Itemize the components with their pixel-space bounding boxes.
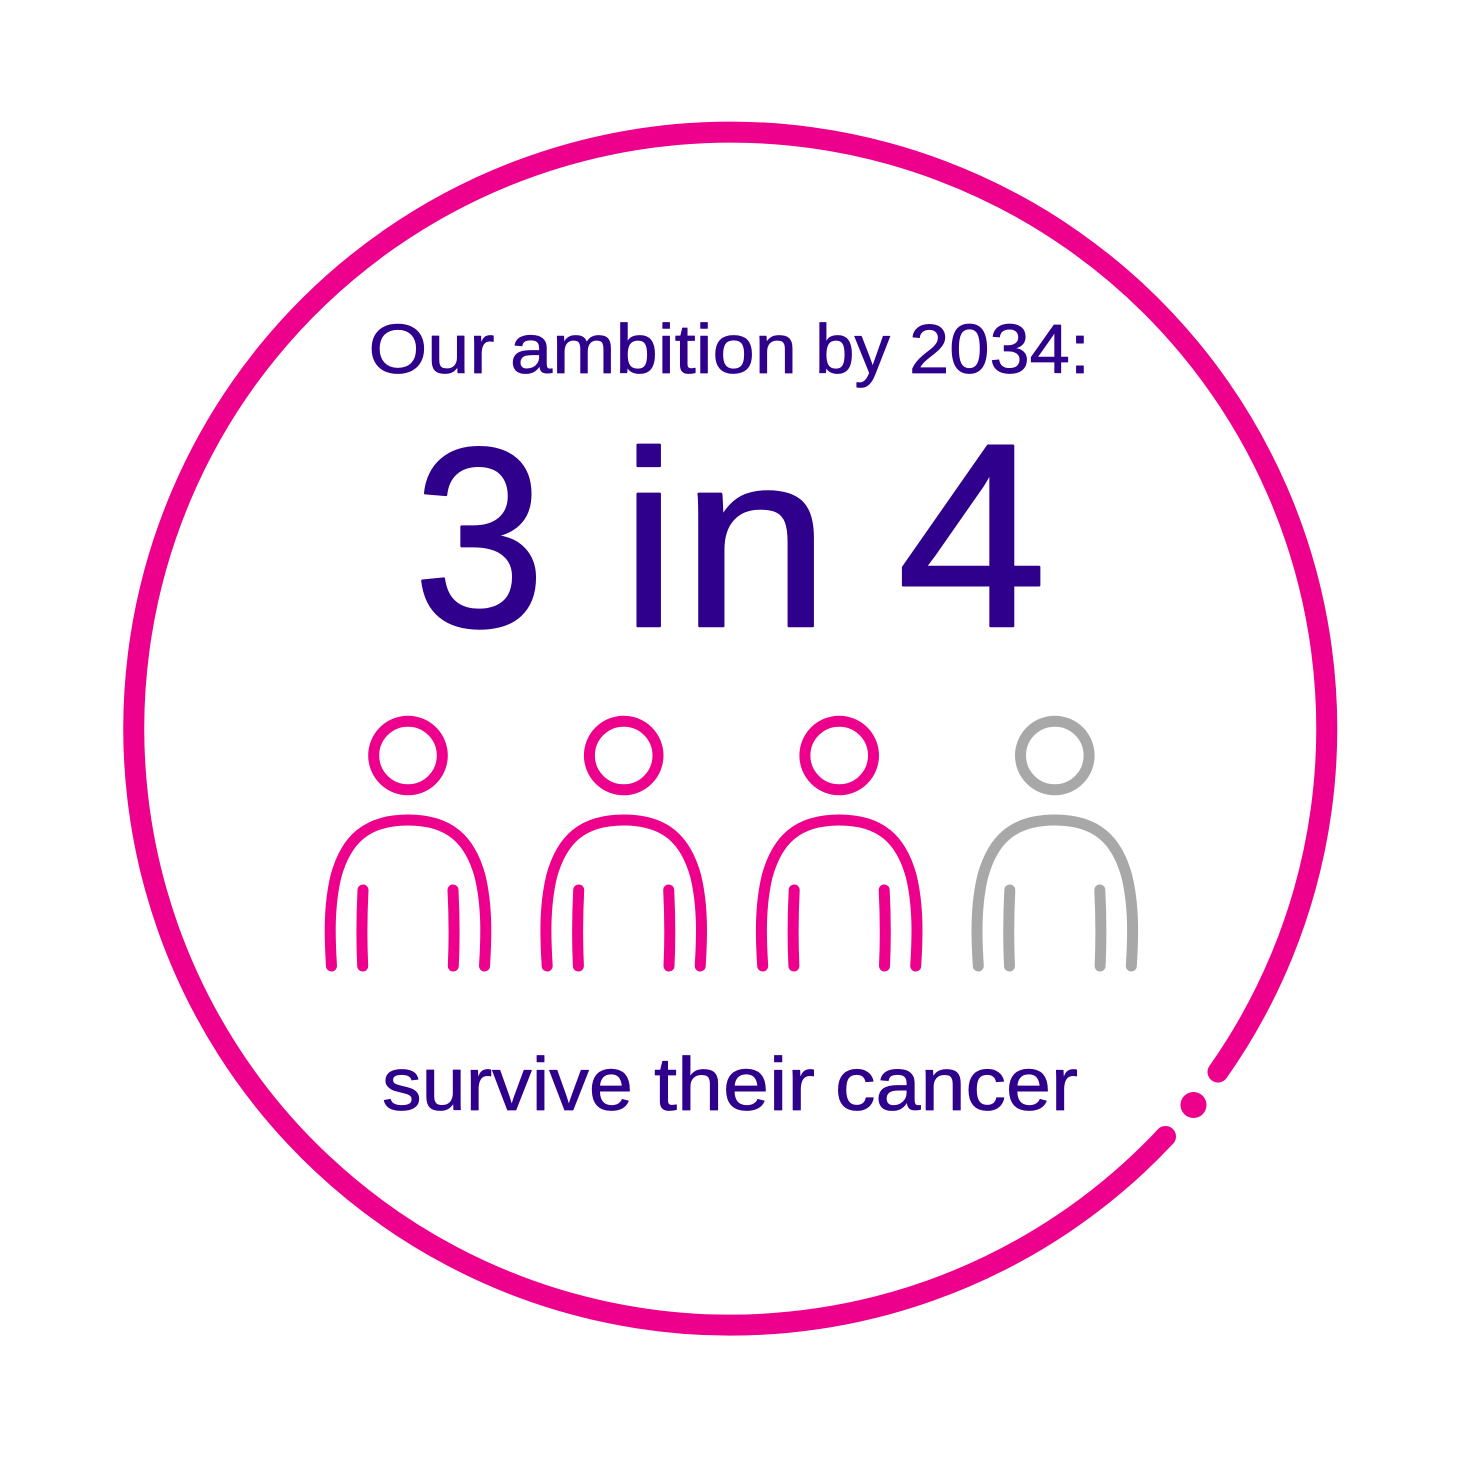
heading: ambition <box>368 310 1090 388</box>
heading: ambition: ambition <box>510 310 797 388</box>
icon: person 2 pink <box>546 721 702 966</box>
caption: survive their cancer: their <box>654 1042 815 1126</box>
heading: ambition: by <box>815 310 890 388</box>
heading: ambition: Our <box>368 310 494 388</box>
ring: broken pink circle <box>134 132 1327 1325</box>
caption: survive their cancer: cancer <box>835 1042 1078 1126</box>
heading: ambition: 2034: <box>909 310 1090 388</box>
caption: survive their cancer <box>382 1042 1078 1126</box>
big stat: 3 in 4: 4 <box>897 389 1047 682</box>
big stat: 3 in 4 <box>413 389 1047 682</box>
big stat: 3 in 4: n <box>681 400 830 679</box>
caption: survive their cancer: survive <box>382 1042 633 1126</box>
ring dot <box>1180 1092 1206 1118</box>
icon: person 1 pink <box>330 721 486 966</box>
big stat: 3 in 4: i <box>621 400 677 679</box>
big stat: 3 in 4: 3 <box>413 395 545 681</box>
icon: person 3 pink <box>761 721 917 966</box>
icon: person 4 grey <box>977 721 1133 966</box>
